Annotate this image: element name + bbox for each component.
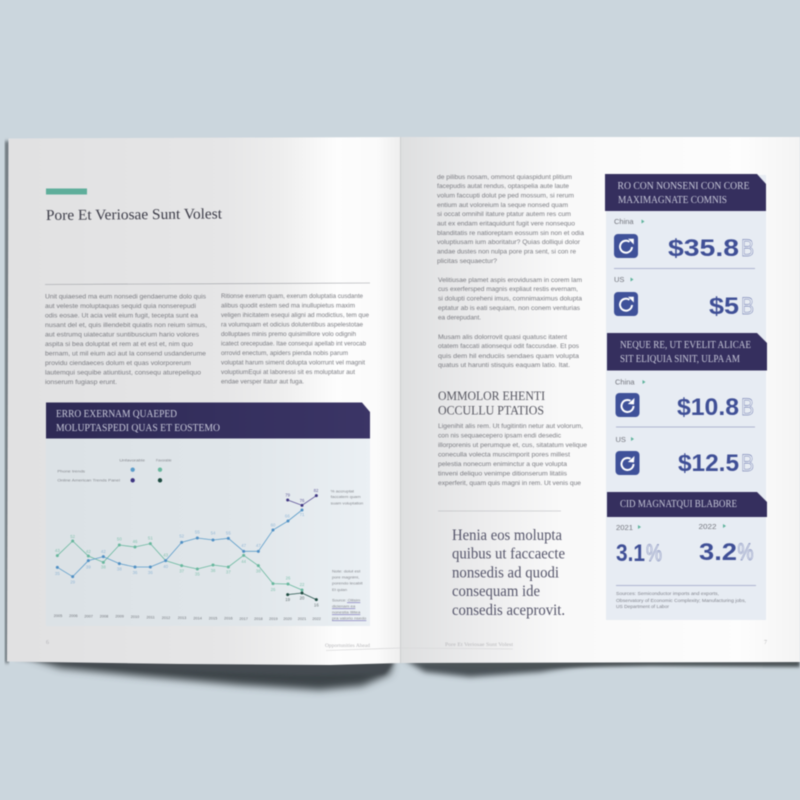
chart header: MOLUPTASPEDI QUAS ET EOSTEMO (56, 423, 220, 434)
footer: left running title: Opportunities Ahead (325, 643, 370, 649)
text block: intro paragraphs: quis dem hil enduciis sendaes quam volupta (438, 353, 579, 360)
text block: left column: lautemqui sequibe atiuntiust, consequ aturepeliquo (45, 370, 201, 376)
text block: intro paragraphs: Musam alis dolorrovit quasi quatusc itatent (438, 334, 567, 341)
stat: US 12.5B: B (741, 450, 754, 477)
text block: intro paragraphs: otatem faccati ationsequi odit faccusdae. Et pos (438, 343, 579, 350)
chart note and source (332, 570, 366, 621)
icon: circular arrow reversed (616, 451, 640, 475)
text block: right column: alibus quodit estem sed ma inullupietus maxim (221, 302, 355, 310)
series: panel favorable: 19 (285, 597, 291, 602)
accent bar (46, 188, 87, 194)
chart side note (331, 490, 363, 505)
subheading: OCCULLU PTATIOS (438, 404, 544, 418)
series: phone favorable: 50 (117, 537, 122, 542)
legend (57, 459, 172, 483)
x axis years: 2013 (178, 616, 186, 620)
subheading: OMMOLOR EHENTI (438, 389, 545, 403)
footer: right running title: Pore Et Veriosae Sunt Volest (445, 642, 513, 648)
series: phone favorable: 38 (256, 569, 261, 574)
series: panel favorable: 20 (300, 595, 305, 600)
chart header: ERRO EXERNAM QUAEPED (56, 409, 177, 420)
text block: intro paragraphs: si dolupti coreheni imus, comnimaximus dolupta (438, 296, 582, 303)
pull quote: quibus ut faccaecte (452, 546, 565, 562)
x axis years: 2012 (162, 616, 170, 620)
text block: right column: voluptiumEqui at laboressi sit es moluptatur aut (221, 369, 355, 376)
series: phone unfavorable: 36 (133, 570, 138, 575)
chart note and source: nonestia Illitea (332, 610, 362, 614)
text block: body below subheading: coneculla volecta muscimporit pores millest (438, 452, 570, 458)
pull quote: nonsedis ad quodi (452, 564, 560, 582)
chart note and source: dicienam ea (332, 604, 356, 608)
x axis years: 2010 (131, 615, 139, 619)
stat: China 10.8B: $10.8 (677, 394, 739, 421)
chart note and source: Source: Ollisim (332, 599, 360, 603)
chart side note: suam voluptation (331, 501, 363, 505)
x axis years: 2008 (100, 614, 108, 618)
text block: right column: endae versper itatur aut fuga. (221, 378, 304, 386)
series: panel unfavorable (285, 488, 319, 507)
series: phone unfavorable: 42 (101, 549, 106, 554)
chart background (46, 438, 370, 626)
text block: intro paragraphs: ea derepudant. (438, 314, 481, 322)
series: phone unfavorable: 39 (86, 565, 91, 570)
stat: 2021: % (646, 540, 662, 567)
series: phone unfavorable: 66 (285, 513, 290, 518)
text block: body below subheading: Ligenihit alis rem. Ut fugitintin netur aut volorum, (438, 423, 583, 430)
chart header (46, 402, 370, 438)
series: phone favorable: 22 (300, 582, 305, 587)
stat: China 10.8B: China (615, 378, 635, 386)
stat: US 12.5B: $12.5 (678, 450, 739, 477)
stat: 2022: 3.2 (699, 539, 737, 566)
stat: US 5B (614, 275, 754, 320)
divider (438, 510, 561, 512)
x axis years: 2011 (147, 615, 155, 619)
stat: US 12.5B: US (616, 435, 626, 444)
legend: Favorable (156, 459, 172, 463)
chart note and source: pra valorio nsedo (332, 616, 366, 620)
series: phone favorable: 43 (55, 548, 60, 553)
text block: body below subheading: pelestia nonecum eniminctur a que volupta (438, 461, 567, 468)
icon: circular arrow (614, 234, 638, 258)
text block: body below subheading: illorporenis ut perumque et, cus, sitatatum velique (438, 442, 587, 449)
series: phone favorable: 37 (179, 569, 185, 574)
text block: left column: odis eosae. Ut acia velit eium fugit, tecepta sunt ea (45, 312, 198, 320)
sidebar background (606, 175, 766, 620)
series: phone unfavorable: 60 (271, 522, 276, 527)
text block: right column: icatect orecepudae. Itae consequi apellab int verocab (221, 340, 366, 348)
series: phone favorable: 52 (70, 534, 76, 539)
text block: intro paragraphs: eptatur ab is eati sequiam, non conem venturias (438, 305, 580, 312)
section header: second: SIT ELIQUIA SINIT, ULPA AM (620, 354, 740, 365)
x axis years: 2007 (84, 614, 93, 618)
stat: China 35.8B: China (614, 217, 634, 226)
stat: China 10.8B: B (741, 394, 754, 421)
x axis years: 2009 (115, 615, 124, 619)
stat: 2021: 2021 (616, 523, 633, 532)
section header: second: NEQUE RE, UT EVELIT ALICAE (620, 340, 751, 351)
series: phone favorable: 38 (211, 568, 216, 573)
stat: 2022 (698, 522, 754, 566)
text block: intro paragraphs: de pilibus nosam, ommost quiaspidunt plitium (437, 174, 572, 181)
x axis years: 2022 (312, 617, 321, 621)
series: panel favorable: 16 (314, 602, 319, 607)
series: phone favorable: 43 (163, 552, 169, 557)
text block: intro paragraphs: quatus ut harunti stisquis eaquam latio. Itat. (438, 362, 570, 369)
panel: line chart (46, 402, 370, 626)
stat: 2021: 3.1 (616, 540, 645, 567)
text block: body below subheading: con nis sequaecepero ipsam endi desedic (438, 432, 562, 440)
chart note and source: porendo lecabit (332, 582, 363, 586)
section header: second (607, 333, 767, 370)
x axis years: 2018 (254, 617, 263, 621)
stat: 2021 (616, 523, 662, 567)
chart note and source: pore magnimi, (332, 576, 359, 580)
legend: Online American Trends Panel (57, 479, 120, 483)
x axis years: 2020 (283, 617, 292, 621)
sources note (616, 591, 746, 609)
series: phone favorable: 38 (101, 565, 106, 570)
series: phone unfavorable: 55 (195, 529, 200, 534)
x axis years: 2016 (224, 617, 233, 621)
text block: intro paragraphs: entium aut voloreium la seque nonsed quam (437, 202, 568, 209)
stat: China 35.8B: $35.8 (668, 235, 739, 262)
text block: left column: aspita si bea doluptat et rem at et est et, nim quo (45, 341, 193, 348)
text block: intro paragraphs: blanditatis re natioreptam eossum sin non et odia (437, 230, 584, 237)
footer: right page number: 7 (764, 640, 767, 646)
text block: intro paragraphs (437, 174, 584, 369)
x axis years: 2005 (54, 614, 62, 618)
text block: body below subheading: tinveni deliquo venimpe ditionserum litatiis (438, 470, 567, 478)
series: phone favorable: 46 (133, 539, 138, 544)
series: phone unfavorable: 29 (70, 580, 76, 585)
text block: intro paragraphs: voluptiusam ium aboritatur? Quias dolliqui dolor (437, 239, 581, 246)
text block: intro paragraphs: plicitas sequaectur? (437, 258, 497, 265)
stat: China 35.8B (614, 217, 754, 262)
text block: right column: orrovid enectum, apiders pienda nobis parum (221, 350, 348, 357)
section header: first: RO CON NONSENI CON CORE (618, 181, 750, 192)
chart plot (54, 459, 366, 621)
series: phone favorable: 42 (86, 549, 91, 554)
chart note and source: Et quian (332, 588, 347, 592)
divider (45, 283, 370, 284)
series: phone unfavorable: 52 (179, 534, 185, 539)
sources note: Observatory of Economic Complexity; Manufacturing jobs, (616, 598, 746, 603)
text block: right column: dolluptaes minis premo quisimillore volo odignih (221, 331, 356, 338)
text block: left column: bernam, ut mil eium aci aut la consend usdanderume (45, 350, 206, 358)
text block: intro paragraphs: facepudis autat rendus, optaspelia aute laute (437, 183, 569, 190)
text block: intro paragraphs: aut ex endam eritaquidunt fugit vere nonsequo (437, 220, 575, 228)
section header: first (605, 174, 766, 211)
section header: first: MAXIMAGNATE COMNIS (618, 195, 727, 206)
text block: intro paragraphs: Velitiusae plamet aspis erovidusam in corem lam (438, 277, 582, 284)
sources note: Sources: Semiconductor imports and exports, (616, 591, 719, 596)
stat: China 35.8B: B (741, 235, 754, 262)
text block: left column: ionserum fugiasp erunt. (45, 379, 117, 386)
page: right (400, 137, 800, 663)
series: panel unfavorable: 82 (314, 488, 319, 493)
x axis years (54, 614, 321, 621)
text block: right column: veligen ihicitatem esequi aligni ad modictius, tem que (221, 312, 369, 319)
section header: third: CID MAGNATQUI BLABORE (620, 499, 737, 510)
stat: US 5B: $5 (709, 293, 739, 320)
text block: intro paragraphs: si occat omnihil itature ptatur autem res cum (437, 211, 571, 218)
text block: body below subheading (438, 423, 587, 487)
stat: 2022: 2022 (698, 522, 716, 531)
title: Pore Et Veriosae Sunt Volest (46, 206, 223, 224)
series: phone unfavorable: 47 (256, 543, 261, 548)
series: phone unfavorable: 54 (211, 530, 216, 535)
text block: left column (45, 294, 207, 386)
text block: intro paragraphs: andae dustes non nulpa pore pra sent, si con re (437, 248, 576, 256)
x axis years: 2021 (298, 617, 306, 621)
text block: right column: voluptat harum siment dolupta volorrunt vel magnit (221, 360, 365, 366)
series: phone unfavorable: 71 (300, 512, 305, 517)
series: phone unfavorable: 55 (226, 530, 231, 535)
x axis years: 2019 (269, 617, 278, 621)
stat: 2022: % (738, 539, 754, 566)
pull quote: Henia eos molupta (452, 527, 562, 544)
series: phone unfavorable: 36 (148, 570, 153, 575)
series: phone unfavorable (55, 508, 305, 585)
subheading (438, 389, 545, 418)
series: phone favorable: 35 (195, 572, 200, 577)
text block: left column: Unit quiaesed ma eum nonsedi gendaerume dolo quis (45, 294, 206, 300)
icon: circular arrow reversed (616, 393, 640, 417)
text block: left column: providu ciendaeces dolum et quas volorporerum (45, 360, 191, 367)
series: phone unfavorable: 35 (55, 571, 60, 576)
series: phone favorable: 51 (148, 536, 153, 541)
series: phone favorable: 37 (226, 569, 231, 574)
series: phone favorable (55, 534, 305, 592)
text block: left column: aut estrumq uiatecatur suntibuscium hario volores (45, 332, 199, 338)
text block: right column: ra volumquam et odicius dolutentibus aspelestotae (221, 322, 363, 328)
legend: Phone trends (57, 470, 85, 474)
text block: left column: aut veleste moluptaquas sequid quia nonserepudi (45, 303, 196, 310)
stat: US 12.5B (616, 435, 754, 477)
legend: Unfavorable (119, 459, 145, 463)
chart side note: faccatem quam (331, 495, 361, 499)
series: phone unfavorable: 47 (241, 543, 247, 548)
text block: right column: Ritionse exerum quam, exerum doluptatia cusdante (221, 293, 363, 300)
stat: US 5B: US (614, 275, 624, 284)
series: phone favorable: 26 (286, 576, 291, 581)
series: panel favorable (285, 591, 319, 607)
text block: left column: nusant del et, quis illendebit quiatis non reium simus, (45, 322, 207, 329)
series: panel unfavorable: 76 (300, 498, 305, 503)
pull quote (452, 527, 565, 619)
pull quote: consequam ide (452, 583, 540, 600)
series: panel unfavorable: 79 (285, 493, 291, 498)
page: left (7, 137, 400, 665)
chart note and source: Note: dolut est (332, 570, 360, 574)
series: phone unfavorable: 38 (117, 567, 122, 572)
page shadows (5, 141, 800, 690)
x axis years: 2014 (193, 616, 203, 620)
text block: intro paragraphs: cus exerfersped magnis expliaut restis evernam, (438, 286, 578, 293)
text block: body below subheading: experferit, quam quis magni in rem. Ut venis que (438, 480, 581, 487)
x axis years: 2017 (239, 617, 248, 621)
stat: US 5B: B (741, 293, 754, 320)
text block: intro paragraphs: volum faccupti dolut pe ped mossum, si rerum (437, 192, 574, 200)
series: phone unfavorable: 40 (163, 564, 169, 569)
icon: circular arrow (614, 292, 638, 316)
chart side note: % accruptat (331, 490, 354, 494)
x axis years: 2015 (209, 617, 217, 621)
series: phone favorable: 44 (241, 559, 247, 564)
section header: third (607, 492, 767, 517)
stat: China 10.8B (615, 378, 754, 421)
sources note: US Department of Labor (616, 604, 670, 609)
pull quote: consedis aceprovit. (452, 602, 565, 619)
series: phone favorable: 26 (271, 587, 276, 592)
footer: left page number: 6 (46, 640, 49, 646)
panel: statistics sidebar (605, 174, 767, 620)
text block: right column (221, 293, 369, 386)
x axis years: 2006 (69, 614, 78, 618)
